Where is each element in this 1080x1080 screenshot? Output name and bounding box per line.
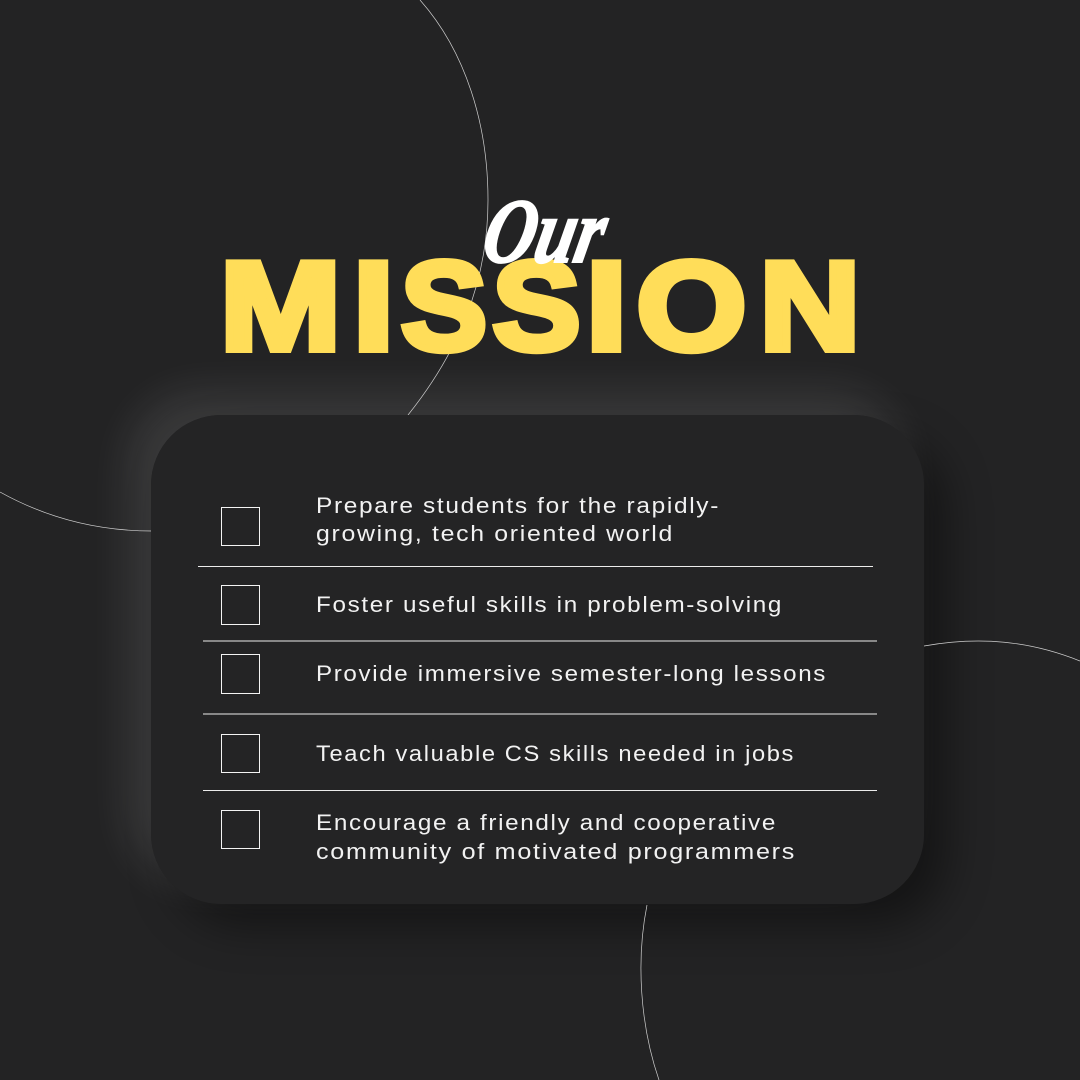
divider 4	[203, 790, 877, 792]
title: MISSION: S	[401, 236, 487, 376]
curve: right	[924, 641, 1080, 661]
item 2: Foster useful skills in problem-solving	[316, 592, 783, 617]
title: Our script: Our	[475, 181, 617, 283]
curve: bottom	[641, 905, 659, 1080]
title: MISSION: S	[492, 236, 580, 376]
curve: left	[0, 492, 152, 531]
title: MISSION: O	[636, 236, 746, 376]
item 3: Provide immersive semester-long lessons	[316, 661, 827, 686]
checklist	[198, 493, 877, 864]
item 1	[222, 493, 720, 546]
title: MISSION: N	[760, 236, 860, 376]
title: MISSION: M	[220, 236, 341, 376]
divider 1	[198, 566, 873, 568]
divider 2	[203, 640, 877, 642]
title: MISSION: I	[586, 236, 627, 376]
item 2	[222, 586, 783, 624]
title: MISSION: I	[353, 236, 394, 376]
item 4: Teach valuable CS skills needed in jobs	[316, 741, 795, 766]
item 4	[222, 734, 795, 772]
title: MISSION	[220, 236, 860, 376]
divider 3	[203, 713, 877, 715]
item 5: Encourage a friendly and cooperative	[316, 810, 777, 835]
item 5	[222, 810, 796, 864]
item 3	[222, 654, 827, 694]
item 1: growing, tech oriented world	[316, 521, 674, 546]
item 1: Prepare students for the rapidly-	[316, 493, 720, 518]
curve: top centre	[408, 0, 488, 415]
panel body	[151, 415, 924, 904]
panel shadows	[151, 415, 924, 904]
item 5: community of motivated programmers	[316, 839, 796, 864]
